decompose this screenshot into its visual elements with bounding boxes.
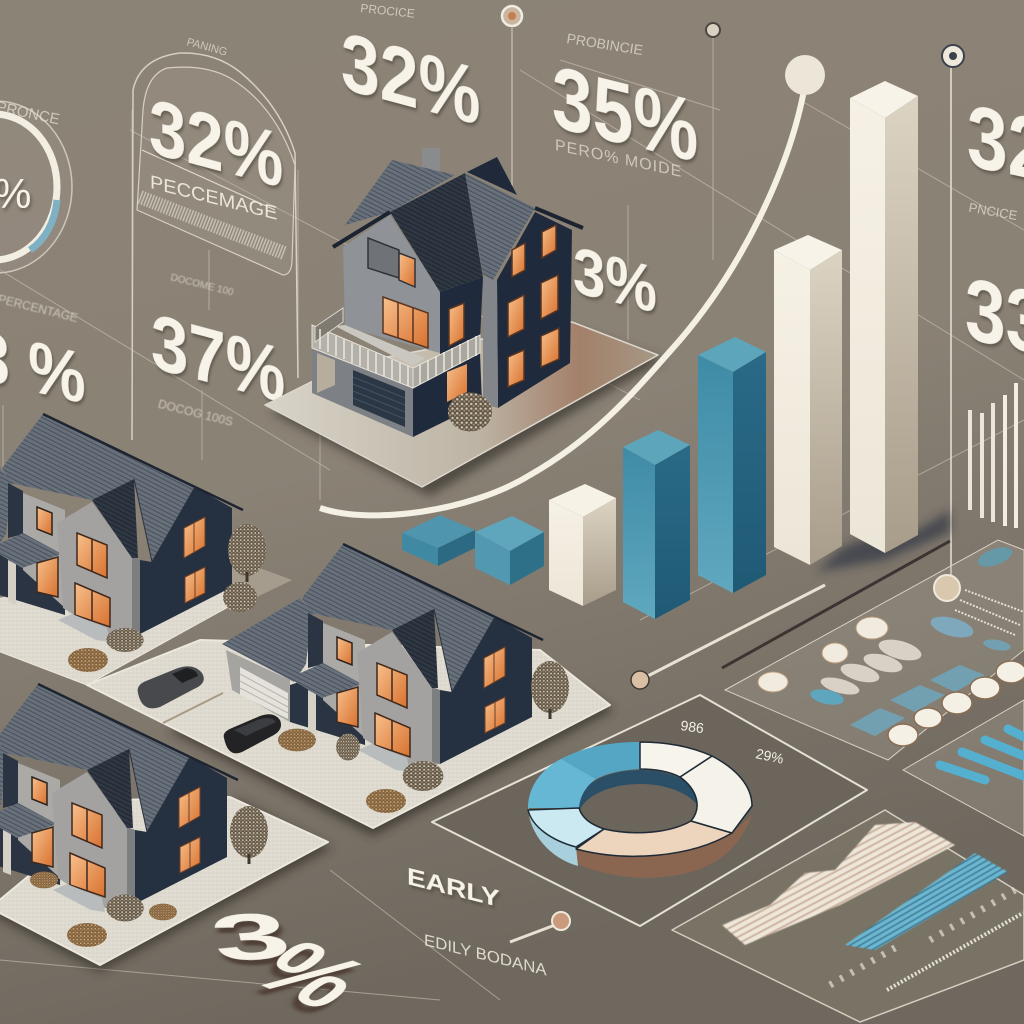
panel grey ovals xyxy=(819,636,924,698)
bar 6 xyxy=(774,235,842,565)
shrub: bottom 4 xyxy=(30,872,58,888)
small 3 percent value: 3% xyxy=(573,233,657,328)
label above 37: DOCOME 100 xyxy=(169,272,235,299)
platform edge xyxy=(722,541,950,668)
pin marker top xyxy=(502,6,522,190)
early sublabel: EDILY BODANA xyxy=(424,931,547,980)
bar 3 xyxy=(549,484,616,606)
pin marker right xyxy=(942,45,964,575)
bar 7 xyxy=(850,81,918,553)
shrub: yard xyxy=(106,628,144,652)
35 percent value: 35% xyxy=(552,48,698,182)
small label above 35: PROBINCIE xyxy=(566,30,644,58)
donut hole xyxy=(578,770,702,838)
shrub xyxy=(448,392,492,432)
37 percent value: 37% xyxy=(151,296,285,420)
donut side xyxy=(528,810,752,878)
tree: upper left xyxy=(228,524,266,582)
right mini bar chart xyxy=(968,383,1018,528)
shrub: bottom 1 xyxy=(106,894,144,922)
shrub: centre 2 xyxy=(403,761,443,791)
front wall xyxy=(343,215,440,353)
rising curve xyxy=(320,55,825,515)
top 32 percent value: 32% xyxy=(341,15,480,143)
label beneath 35: PERO% MOIDE xyxy=(555,136,682,181)
shrub: centre 1 xyxy=(278,729,316,751)
shrub: centre 4 xyxy=(336,734,360,760)
dashed baseline xyxy=(887,913,1023,990)
right small label: PNCICE xyxy=(968,200,1019,223)
early label: EARLY xyxy=(407,862,500,913)
balcony xyxy=(312,308,480,388)
bar 4 xyxy=(623,430,690,619)
shrub: bottom 2 xyxy=(67,923,107,947)
bottom percent xyxy=(204,898,392,1024)
panel big pills xyxy=(758,617,888,692)
front roof xyxy=(390,173,483,292)
lower structure xyxy=(312,348,482,437)
early pin xyxy=(510,912,570,942)
panel blue cells xyxy=(809,543,1015,736)
panel grid lines xyxy=(955,590,1024,635)
pin xyxy=(934,575,960,601)
blurred label under 37: DOCOG 100S xyxy=(157,397,234,429)
transparent panel with dots xyxy=(725,540,1024,760)
donut segments xyxy=(528,742,752,856)
bottom digit: 3 xyxy=(204,898,297,975)
plate: centre house xyxy=(87,640,614,836)
pin marker xyxy=(706,23,720,37)
card barcode xyxy=(140,197,284,253)
plate: bottom house xyxy=(0,797,332,972)
transparent panel right xyxy=(903,700,1024,836)
chimney xyxy=(422,148,440,184)
donut pale side xyxy=(528,808,578,866)
warm streaks xyxy=(722,822,955,945)
house: upper left xyxy=(0,414,243,642)
shrub: upper left xyxy=(223,582,257,612)
car: centre left xyxy=(138,666,204,708)
bar chart xyxy=(402,81,918,619)
bar 2 xyxy=(475,516,544,585)
side column xyxy=(483,277,498,408)
top small label: PROCICE xyxy=(360,1,416,21)
shrub: centre 3 xyxy=(366,789,406,813)
shrub: bottom 3 xyxy=(149,904,177,920)
back dark roof xyxy=(467,157,517,195)
back roof xyxy=(345,160,455,225)
streak chart panel xyxy=(672,810,1024,1022)
bottom percent sign: % xyxy=(230,926,392,1024)
gauge ring xyxy=(0,101,72,273)
panel buttons xyxy=(888,661,1024,746)
blue streaks xyxy=(845,853,1008,950)
right wall xyxy=(497,212,572,408)
curve end marker xyxy=(785,55,825,95)
plate: main house xyxy=(265,322,664,496)
shadow under tall bars xyxy=(816,510,950,572)
donut label left: 986 xyxy=(680,717,705,736)
tree: bottom xyxy=(230,806,268,864)
pointer line xyxy=(631,585,825,689)
bar 5 xyxy=(698,337,766,593)
card label: PECCEMAGE xyxy=(150,172,277,225)
card value: 32% xyxy=(149,81,283,205)
house: main xyxy=(312,148,583,437)
eaves xyxy=(333,208,583,247)
donut panel xyxy=(432,695,867,926)
donut label right: 29% xyxy=(754,745,785,767)
top small label: PANING xyxy=(185,36,228,59)
dashed notes xyxy=(830,890,1015,985)
plate: lower left house xyxy=(0,555,292,685)
house: centre xyxy=(222,544,543,772)
windows xyxy=(368,225,559,387)
gray roof xyxy=(465,173,535,280)
car: centre right xyxy=(224,714,281,753)
glass card xyxy=(132,53,298,440)
house: bottom xyxy=(0,684,238,912)
donut hole floor xyxy=(580,784,696,832)
tree: centre xyxy=(531,661,569,719)
shrub: path xyxy=(68,648,108,672)
bar 1 xyxy=(402,515,475,566)
sub wall xyxy=(440,277,483,360)
